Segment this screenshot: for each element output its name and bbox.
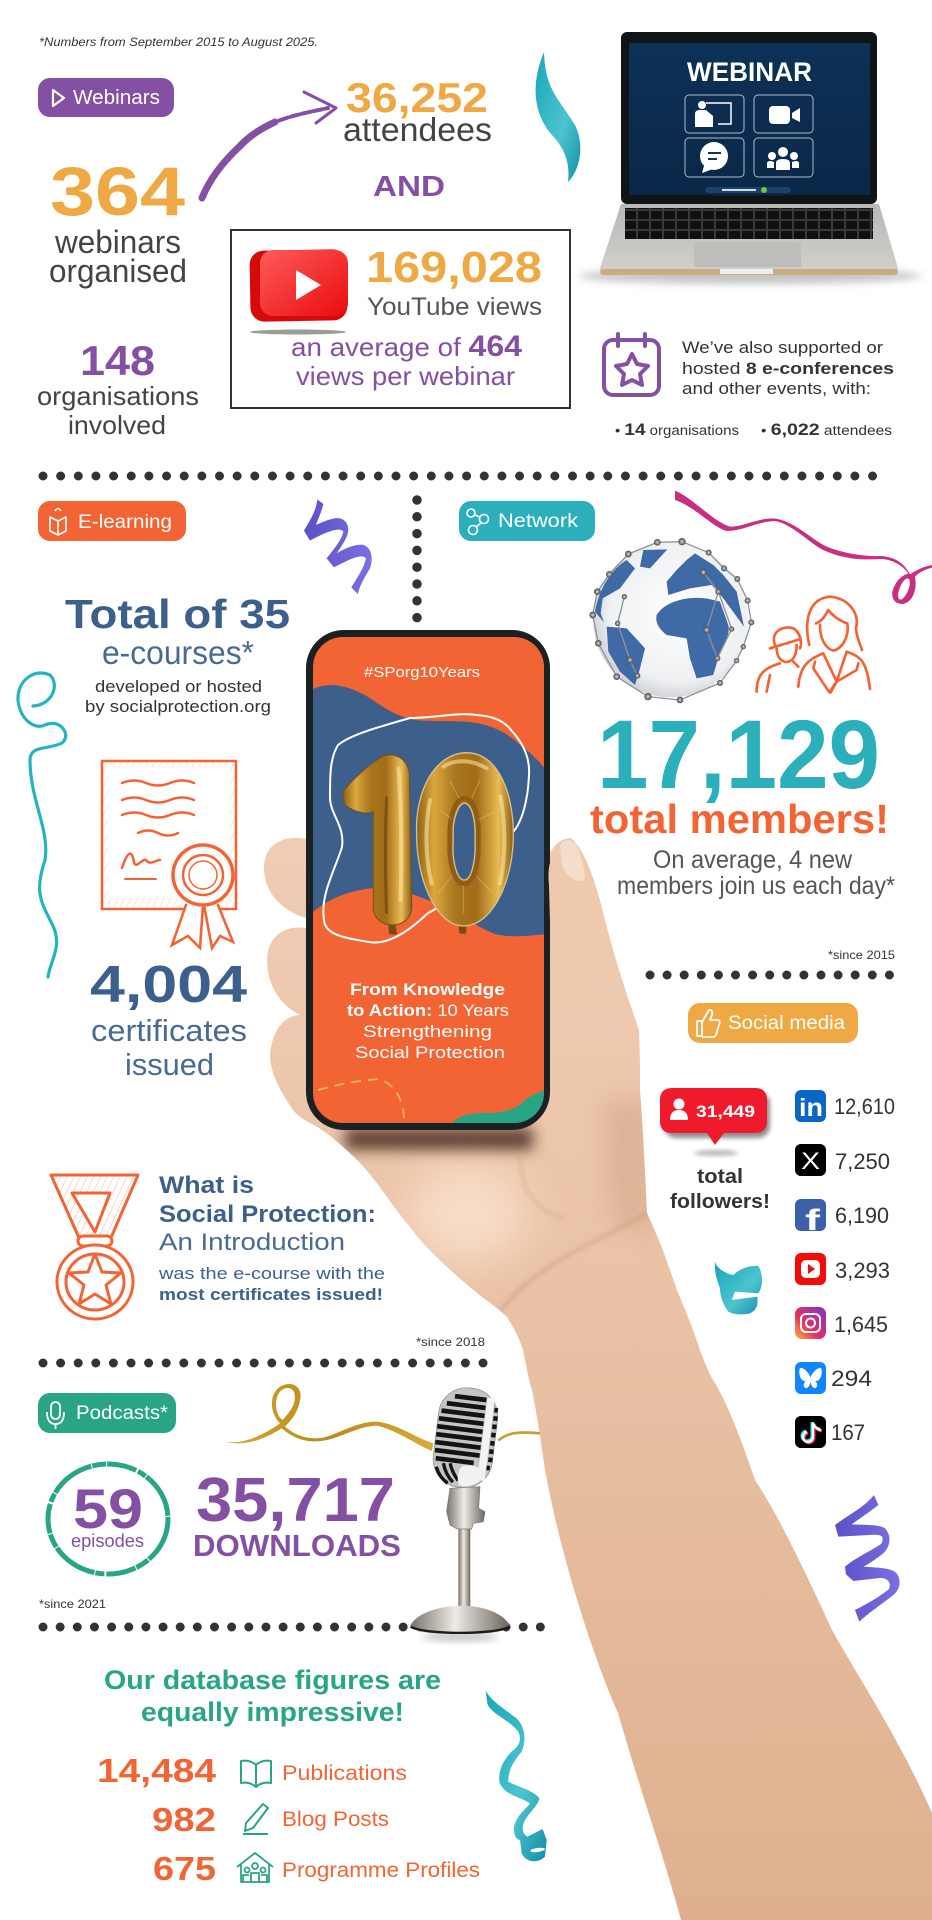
LinkedIn row: in <box>799 1094 823 1122</box>
Bluesky row: 294 <box>831 1366 872 1391</box>
database: publications <box>97 1752 407 1789</box>
ribbon: purple right <box>835 1495 900 1622</box>
Instagram row: 1,645 <box>834 1312 888 1337</box>
blue blob <box>313 685 546 936</box>
YouTube row: 3,293 <box>835 1258 890 1283</box>
arrow: hand-drawn purple <box>202 92 336 198</box>
stat: 35,717 downloads: 35,717 <box>196 1466 395 1535</box>
section pill: E-learning: E-learning <box>78 511 172 533</box>
text: e-conferences: We’ve also supported or <box>682 338 883 357</box>
stat: 35,717 downloads: DOWNLOADS <box>193 1528 401 1563</box>
database: blog posts: 982 <box>152 1801 216 1838</box>
section pill: Network: Network <box>498 510 578 532</box>
section pill: E-learning <box>38 501 186 541</box>
text: most popular e-course <box>158 1172 385 1304</box>
green corner <box>452 1090 546 1125</box>
icon: microphone <box>47 1402 64 1429</box>
database: publications: 14,484 <box>97 1752 217 1789</box>
LinkedIn row: 12,610 <box>834 1094 895 1119</box>
laptop illustration: WEBINAR <box>687 57 812 87</box>
smartphone <box>306 630 550 1130</box>
badge: 31,449 total followers: followers! <box>670 1191 770 1213</box>
heading: database: Our database figures are <box>104 1665 441 1695</box>
text: most popular e-course: Social Protection: <box>159 1201 376 1228</box>
ribbon: gold <box>225 1384 540 1451</box>
stat: total e-courses: e-courses* <box>102 634 254 671</box>
icon: group tile <box>754 138 813 177</box>
ribbon: small teal <box>715 1262 762 1314</box>
icon: certificate <box>102 761 236 948</box>
stat: 148 organisations: 148 <box>80 337 155 384</box>
badge: 31,449 total followers: total <box>697 1166 743 1188</box>
stat: 148 organisations: organisations <box>37 381 199 411</box>
phone caption: From Knowledge <box>350 980 505 999</box>
text: e-conference figures <box>615 420 892 439</box>
text: e-conference figures: • 6,022 attendees <box>761 420 892 439</box>
section pill: Podcasts <box>38 1393 176 1433</box>
X row: 7,250 <box>835 1149 890 1174</box>
stat: 4,004 certificates issued: issued <box>125 1047 214 1082</box>
database: programme profiles <box>153 1850 480 1887</box>
stat: total e-courses: by socialprotection.org <box>85 698 271 716</box>
stat: 4,004 certificates issued: 4,004 <box>90 956 247 1014</box>
heading: database: equally impressive! <box>141 1697 404 1727</box>
footnote: since 2021: *since 2021 <box>39 1597 106 1611</box>
text: most popular e-course: was the e-course with the <box>158 1264 385 1283</box>
dashed decoration <box>318 1078 405 1118</box>
text: e-conferences: hosted 8 e-conferences <box>682 359 894 378</box>
database: blog posts: Blog Posts <box>282 1808 389 1831</box>
database: programme profiles: Programme Profiles <box>282 1859 480 1882</box>
stat: 36,252 attendees: 36,252 <box>346 74 488 121</box>
Bluesky row <box>795 1362 872 1394</box>
phone caption: to Action: 10 Years <box>347 1001 509 1020</box>
thumb <box>548 838 614 1000</box>
laptop base <box>600 204 898 275</box>
database: programme profiles: 675 <box>153 1850 216 1887</box>
stat: 364 webinars organised <box>49 153 187 289</box>
panel: YouTube views box: YouTube views <box>367 293 542 321</box>
text: average new members: On average, 4 new <box>653 846 853 874</box>
ribbon: teal database <box>486 1691 547 1861</box>
globe network illustration <box>589 538 754 703</box>
gold balloon number 10 <box>343 753 513 934</box>
stat: 17,129 total members: total members! <box>590 796 889 842</box>
icon: book <box>241 1761 271 1787</box>
icon: presenter tile <box>685 95 744 133</box>
text: average per webinar: an average of 464 <box>291 330 522 363</box>
Instagram row <box>795 1307 888 1339</box>
footnote: *Numbers from September 2015 to August 2025. <box>39 37 318 49</box>
social media list <box>795 1090 895 1448</box>
icon: camera tile <box>754 95 813 133</box>
panel: YouTube views box <box>231 230 570 408</box>
ribbon: teal top <box>536 52 580 182</box>
stat: 148 organisations <box>37 337 199 440</box>
icon: pencil <box>243 1804 268 1834</box>
Facebook row: f <box>805 1204 822 1237</box>
laptop illustration <box>578 32 922 284</box>
stat: 364 webinars organised: 364 <box>50 153 185 230</box>
stat: 148 organisations: involved <box>68 410 166 440</box>
icon: house with people <box>237 1853 273 1882</box>
ribbon: thin teal left <box>18 673 66 977</box>
white outline blob <box>323 714 529 943</box>
stat: 17,129 total members: 17,129 <box>597 700 880 809</box>
stat: 4,004 certificates issued <box>90 956 247 1082</box>
icon: play <box>53 90 64 106</box>
section pill: Webinars: Webinars <box>73 87 160 109</box>
heading: database <box>104 1665 441 1727</box>
certificate seal <box>172 905 233 948</box>
heading: AND: AND <box>373 171 445 203</box>
icon: user <box>674 1098 684 1110</box>
section pill: Network <box>459 501 595 541</box>
phone caption: Social Protection <box>355 1043 505 1062</box>
icon: open box <box>50 508 66 535</box>
Facebook row <box>795 1199 889 1237</box>
thumbnail <box>560 840 585 881</box>
stat: total e-courses: Total of 35 <box>65 591 290 637</box>
stat: 169,028: 169,028 <box>366 243 542 292</box>
YouTube row <box>795 1253 890 1285</box>
icon: calendar star <box>604 334 659 395</box>
stat: 364 webinars organised: organised <box>49 253 187 289</box>
hashtag: #SPorg10Years <box>364 664 480 681</box>
ribbon: purple zigzag <box>304 499 372 594</box>
phone caption: Strengthening <box>363 1022 492 1041</box>
icon: people outline <box>757 597 870 692</box>
podcast episodes badge: episodes <box>71 1531 144 1551</box>
ribbon: pink <box>675 491 932 604</box>
icon: YouTube 3D button <box>249 249 348 334</box>
phone caption <box>347 980 509 1062</box>
stat: 36,252 attendees: attendees <box>343 111 492 148</box>
X row <box>795 1144 890 1176</box>
text: average new members: members join us each day* <box>617 872 895 900</box>
continents <box>595 549 744 685</box>
text: e-conferences <box>682 338 894 398</box>
icon: thumbs up <box>697 1010 720 1037</box>
database: blog posts <box>152 1801 389 1838</box>
status bar <box>705 187 791 193</box>
TikTok row: 167 <box>831 1420 865 1445</box>
icon: network nodes <box>467 509 488 534</box>
text: average new members <box>617 846 895 900</box>
LinkedIn row <box>795 1090 895 1122</box>
icon: medal <box>51 1175 138 1319</box>
podcast episodes badge: 59 <box>73 1477 143 1540</box>
X row: X <box>801 1148 820 1175</box>
stat: 4,004 certificates issued: certificates <box>91 1013 247 1048</box>
stat: 36,252 attendees <box>343 74 492 148</box>
stat: total e-courses <box>65 591 290 716</box>
Facebook row: 6,190 <box>835 1203 889 1228</box>
text: e-conferences: and other events, with: <box>682 379 871 398</box>
section pill: Social media <box>688 1003 858 1043</box>
section pill: Webinars <box>38 78 174 117</box>
database: publications: Publications <box>282 1762 407 1785</box>
text: most popular e-course: What is <box>159 1172 254 1199</box>
TikTok row <box>795 1416 865 1448</box>
wire connections <box>593 542 751 700</box>
footnote: since 2018: *since 2018 <box>416 1335 485 1349</box>
stat: total e-courses: developed or hosted <box>95 678 262 696</box>
icon: chat tile <box>685 138 744 177</box>
footnote: since 2015: *since 2015 <box>828 948 895 962</box>
section pill: Social media: Social media <box>728 1013 845 1034</box>
panel: YouTube views box: views per webinar <box>296 361 515 391</box>
text: most popular e-course: most certificates issued! <box>159 1285 383 1304</box>
stat: 364 webinars organised: webinars <box>54 224 181 260</box>
text: most popular e-course: An Introduction <box>159 1229 345 1256</box>
podcast episodes badge <box>48 1464 168 1574</box>
stat: 35,717 downloads <box>193 1466 401 1563</box>
badge: 31,449 total followers: 31,449 <box>696 1102 755 1121</box>
text: e-conference figures: • 14 organisations <box>615 420 739 439</box>
podcast microphone <box>411 1384 509 1641</box>
hand and arm holding phone <box>250 830 932 1920</box>
laptop screen <box>621 32 877 204</box>
badge: 31,449 total followers <box>660 1088 770 1213</box>
section pill: Podcasts: Podcasts* <box>76 1402 168 1424</box>
